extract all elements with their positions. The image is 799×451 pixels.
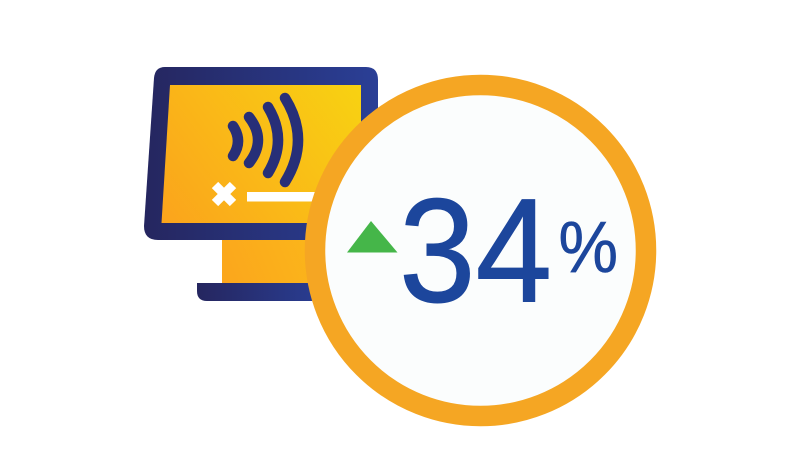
icon: payment terminal monitor: [144, 67, 378, 301]
monitor screen: [162, 85, 361, 223]
monitor frame: [144, 67, 378, 240]
value: 34: 34: [399, 169, 552, 334]
badge circle: [315, 85, 646, 416]
icon: green up triangle: [347, 221, 398, 252]
white entry bar: [247, 192, 317, 202]
monitor base: [197, 283, 330, 301]
icon: contactless waves: [233, 98, 298, 182]
icon: white cross: [215, 185, 233, 203]
percent sign: %: [558, 207, 618, 288]
monitor stand: [222, 238, 327, 285]
